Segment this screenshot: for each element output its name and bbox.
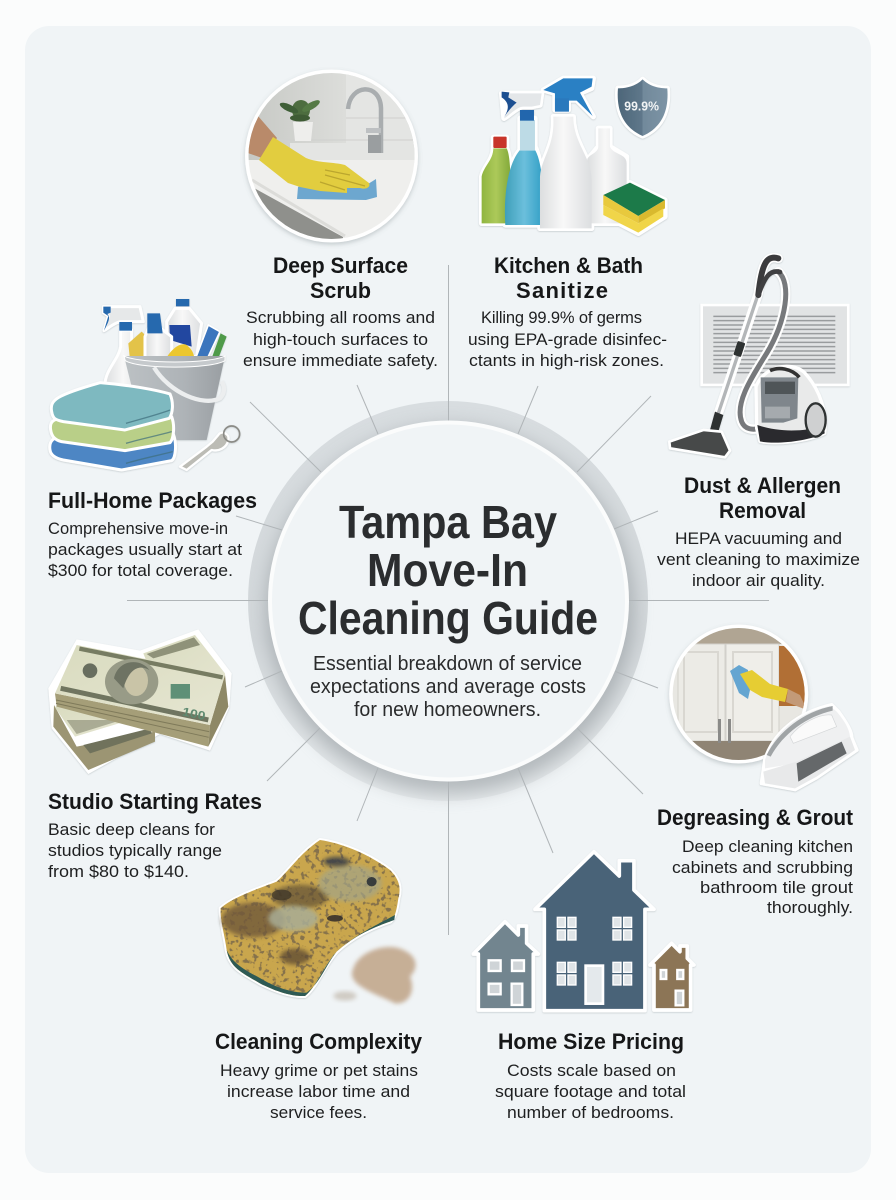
body text: dust and allergen removal: vent cleaning to maximize bbox=[657, 551, 860, 569]
body text: cleaning complexity: service fees. bbox=[270, 1104, 367, 1122]
body text: deep surface scrub: ensure immediate safety. bbox=[243, 352, 438, 370]
central hub circle bbox=[268, 420, 629, 782]
heading: dust and allergen removal: Dust & Allergen bbox=[684, 473, 841, 498]
icon: cleaning bottles, sponge and shield: 99.9% bbox=[624, 100, 659, 114]
body text: deep surface scrub bbox=[243, 309, 438, 370]
heading: dust and allergen removal: Removal bbox=[719, 498, 806, 523]
icon: stacks of hundred dollar bills bbox=[48, 629, 232, 774]
body text: degreasing and grout: bathroom tile grout bbox=[700, 879, 853, 897]
sponge bbox=[297, 179, 377, 200]
body text: cleaning complexity: Heavy grime or pet stains bbox=[220, 1062, 418, 1080]
subtitle bbox=[310, 653, 586, 721]
hub outer ring and shadow bbox=[248, 401, 648, 801]
main title: Tampa Bay bbox=[339, 496, 557, 548]
icon: wiping cabinet with scrub brush bbox=[669, 624, 857, 789]
body text: kitchen and bath sanitize: using EPA-grade disinfec- bbox=[468, 331, 667, 349]
panel: home size pricing bbox=[473, 852, 694, 1122]
panel: dust and allergen removal bbox=[657, 258, 860, 590]
body text: studio starting rates: Basic deep cleans for bbox=[48, 821, 216, 839]
body text: kitchen and bath sanitize: Killing 99.9% of germs bbox=[481, 309, 642, 327]
body text: home size pricing bbox=[495, 1062, 686, 1122]
body text: dust and allergen removal: indoor air quality. bbox=[692, 572, 825, 590]
panel: studio starting rates bbox=[48, 629, 262, 881]
heading: deep surface scrub bbox=[273, 253, 408, 303]
body text: full-home packages: $300 for total coverage. bbox=[48, 562, 233, 580]
icon: cleaning bottles, sponge and shield bbox=[482, 78, 668, 233]
body text: full-home packages bbox=[48, 520, 242, 580]
body text: degreasing and grout: cabinets and scrubbing bbox=[672, 859, 853, 877]
plant bbox=[293, 122, 313, 141]
radial connector lines bbox=[127, 265, 769, 935]
subtitle: expectations and average costs bbox=[310, 676, 586, 698]
icon: stacks of hundred dollar bills: 100 bbox=[181, 705, 207, 723]
body text: studio starting rates bbox=[48, 821, 222, 881]
heading: dust and allergen removal bbox=[684, 473, 841, 523]
body text: deep surface scrub: Scrubbing all rooms and bbox=[246, 309, 435, 327]
body text: degreasing and grout: Deep cleaning kitchen bbox=[682, 838, 853, 856]
panel: deep surface scrub bbox=[243, 70, 438, 370]
panel: kitchen and bath sanitize bbox=[468, 78, 668, 370]
body text: degreasing and grout bbox=[672, 838, 853, 917]
heading: full-home packages: Full-Home Packages bbox=[48, 488, 257, 513]
main title bbox=[298, 496, 598, 644]
body text: deep surface scrub: high-touch surfaces to bbox=[253, 331, 428, 349]
heading: kitchen and bath sanitize: Kitchen & Bath bbox=[494, 253, 643, 278]
icon: three houses of increasing size bbox=[473, 852, 694, 1011]
body text: studio starting rates: from $80 to $140. bbox=[48, 863, 189, 881]
arm bbox=[248, 116, 277, 158]
icon: vacuum cleaner and air vent bbox=[669, 258, 848, 457]
subtitle: Essential breakdown of service bbox=[313, 653, 582, 675]
glove bbox=[259, 137, 369, 193]
icon: dirty moldy sponge with dust pile bbox=[221, 840, 416, 1003]
main title: Move-In bbox=[367, 544, 528, 596]
body text: home size pricing: Costs scale based on bbox=[507, 1062, 676, 1080]
icon: supply bucket, towels and key bbox=[50, 299, 240, 470]
body text: dust and allergen removal: HEPA vacuuming and bbox=[675, 530, 842, 548]
body text: dust and allergen removal bbox=[657, 530, 860, 590]
body text: kitchen and bath sanitize bbox=[468, 309, 667, 370]
heading: deep surface scrub: Scrub bbox=[310, 278, 371, 303]
body text: degreasing and grout: thoroughly. bbox=[767, 899, 853, 917]
heading: degreasing and grout: Degreasing & Grout bbox=[657, 805, 854, 830]
body text: kitchen and bath sanitize: ctants in high-risk zones. bbox=[469, 352, 664, 370]
panel: degreasing and grout bbox=[657, 624, 857, 917]
heading: kitchen and bath sanitize: Sanitize bbox=[516, 278, 608, 303]
body text: full-home packages: packages usually start at bbox=[48, 541, 242, 559]
heading: studio starting rates: Studio Starting Rates bbox=[48, 789, 262, 814]
body text: home size pricing: square footage and total bbox=[495, 1083, 686, 1101]
main title: Cleaning Guide bbox=[298, 592, 598, 644]
body text: cleaning complexity bbox=[220, 1062, 418, 1122]
heading: home size pricing: Home Size Pricing bbox=[498, 1029, 684, 1054]
body text: full-home packages: Comprehensive move-in bbox=[48, 520, 228, 538]
heading: cleaning complexity: Cleaning Complexity bbox=[215, 1029, 423, 1054]
heading: deep surface scrub: Deep Surface bbox=[273, 253, 408, 278]
body text: studio starting rates: studios typically range bbox=[48, 842, 222, 860]
panel: full-home packages bbox=[48, 299, 257, 580]
icon: gloved hand wiping counter bbox=[245, 70, 419, 250]
faucet bbox=[348, 89, 381, 153]
towels bbox=[50, 383, 176, 470]
panel: cleaning complexity bbox=[215, 840, 423, 1122]
heading: kitchen and bath sanitize bbox=[494, 253, 643, 303]
body text: home size pricing: number of bedrooms. bbox=[507, 1104, 674, 1122]
key bbox=[180, 433, 229, 470]
body text: cleaning complexity: increase labor time and bbox=[227, 1083, 410, 1101]
subtitle: for new homeowners. bbox=[354, 699, 541, 721]
